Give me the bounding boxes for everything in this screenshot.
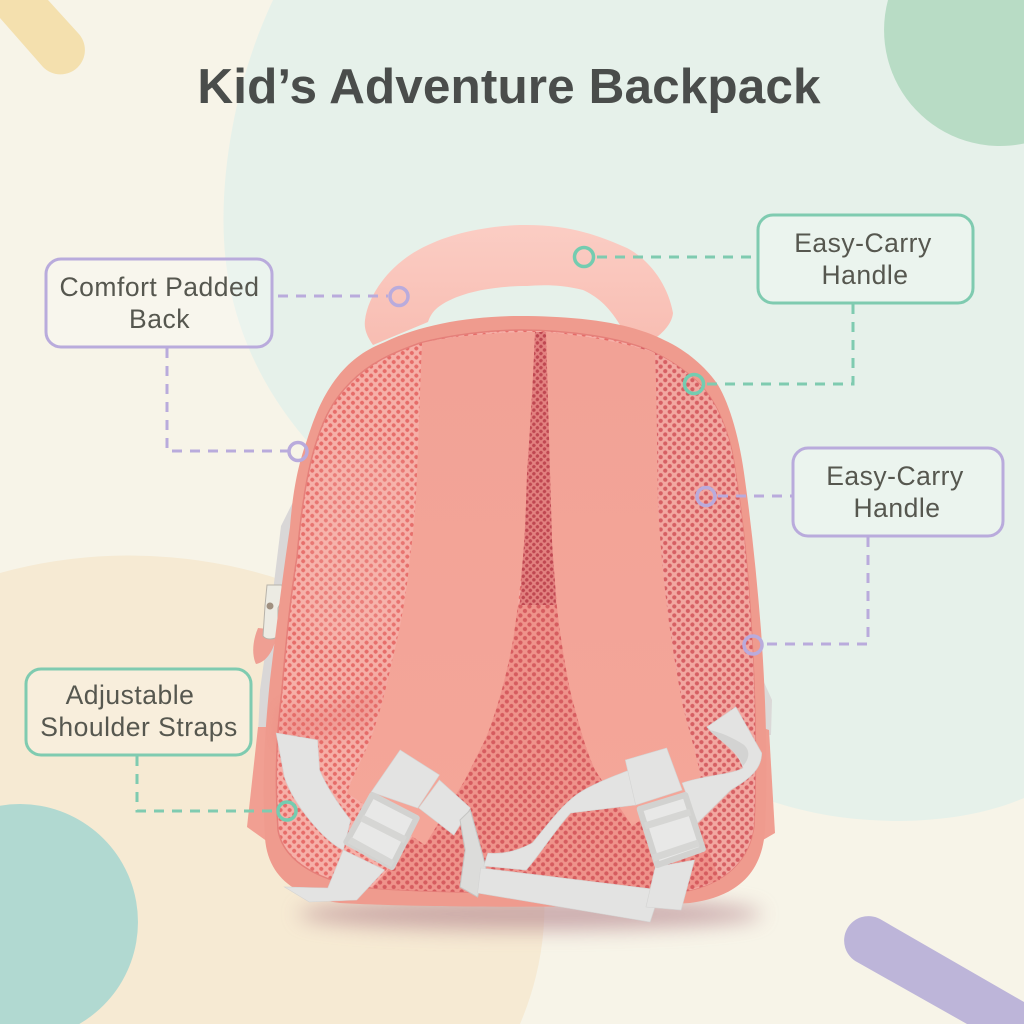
title: Kid’s Adventure Backpack <box>197 59 821 114</box>
label box <box>793 448 1003 536</box>
carry handle <box>365 225 673 345</box>
upper connector <box>597 256 757 258</box>
label text: Handle <box>854 493 940 523</box>
right shoulder strap <box>546 332 701 826</box>
label box <box>26 669 251 755</box>
left lower webbing <box>284 850 385 902</box>
backpack body <box>264 316 766 907</box>
label text: Back <box>129 304 190 334</box>
callout: easy-carry handle (purple) <box>697 448 1003 654</box>
upper connector <box>718 494 792 498</box>
marker upper <box>390 288 408 306</box>
webbing straps and buckles <box>276 707 762 922</box>
label box <box>758 215 973 303</box>
left buckle <box>346 795 417 867</box>
callout: adjustable shoulder straps <box>26 669 296 820</box>
left buckle crossbar <box>349 818 405 864</box>
right loop webbing <box>682 707 762 823</box>
upper connector <box>278 294 388 298</box>
right upper webbing <box>625 748 682 805</box>
callout: comfort padded back <box>46 259 408 460</box>
marker upper <box>697 488 715 506</box>
marker upper <box>574 248 594 266</box>
connector <box>137 756 276 811</box>
left loop webbing <box>276 733 351 850</box>
left connector webbing <box>419 780 470 835</box>
ground shadow <box>298 898 762 930</box>
label text: Adjustable <box>66 680 194 710</box>
side panel right <box>760 680 775 840</box>
diagonal strap <box>484 770 636 870</box>
label text: Shoulder Straps <box>40 712 238 742</box>
right buckle <box>640 795 703 865</box>
side panel left <box>247 500 300 842</box>
lower connector <box>764 537 868 644</box>
lower cross strap <box>478 868 660 922</box>
label box <box>46 259 272 347</box>
marker lower <box>684 374 704 394</box>
lower connector <box>167 348 288 451</box>
center clip <box>460 810 486 897</box>
right buckle crossbar <box>645 812 699 858</box>
mesh back panel <box>276 330 755 893</box>
label text: Easy-Carry <box>794 228 932 258</box>
label text: Handle <box>822 260 908 290</box>
label text: Comfort Padded <box>60 272 259 302</box>
label text: Easy-Carry <box>826 461 964 491</box>
mesh right side darker <box>640 346 756 891</box>
right loop inner fold <box>709 730 748 766</box>
right lower webbing <box>646 860 695 910</box>
backpack illustration <box>247 225 775 930</box>
callout: easy-carry handle (green) <box>574 215 973 394</box>
left shoulder strap <box>347 332 535 845</box>
mesh padding highlights <box>280 448 410 745</box>
marker lower <box>744 636 762 654</box>
mesh center gap <box>520 332 556 605</box>
marker <box>278 802 296 820</box>
marker lower <box>289 442 307 460</box>
mesh lower center <box>371 600 720 893</box>
lower connector <box>706 304 853 384</box>
left upper webbing <box>371 750 439 808</box>
